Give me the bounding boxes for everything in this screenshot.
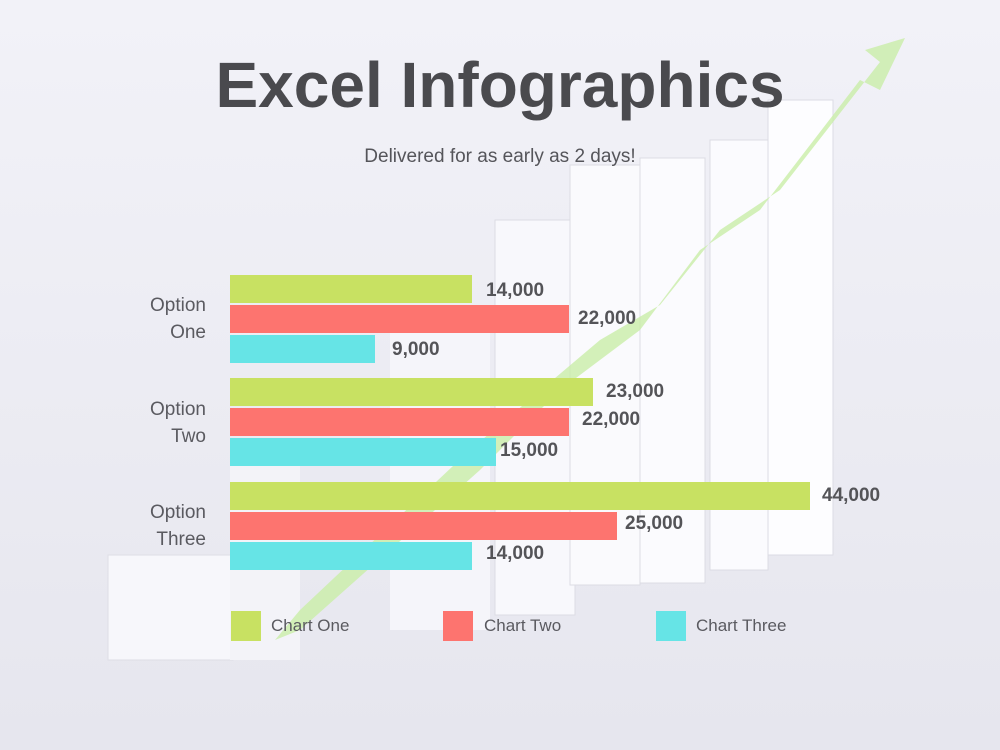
- category label: Option Three: Three: [156, 529, 206, 550]
- bars: Option One: 9,000: [392, 339, 440, 360]
- legend: [231, 611, 786, 641]
- category label: Option Two: Option: [150, 399, 206, 420]
- bars: Option Two: 22,000: [582, 409, 640, 430]
- bars: Option Three: [230, 482, 880, 570]
- category label: Option Two: Two: [171, 426, 206, 447]
- category label: Option One: Option: [150, 295, 206, 316]
- bars: Option Two: 15,000: [500, 440, 558, 461]
- bars: Option One: [230, 275, 636, 363]
- bars: Option Two: [230, 378, 664, 466]
- category label: Option Three: Option: [150, 502, 206, 523]
- title: Excel Infographics: [215, 49, 785, 121]
- category label: Option One: One: [170, 322, 206, 343]
- subtitle: Delivered for as early as 2 days!: [364, 146, 636, 167]
- category label: Option Two: [150, 399, 206, 447]
- legend: Chart Three: [696, 616, 786, 635]
- category label: Option Three: [150, 502, 206, 550]
- bar chart: [150, 295, 206, 550]
- bars: Option Three: 14,000: [486, 543, 544, 564]
- bars: Option One: 14,000: [486, 280, 544, 301]
- legend: Chart Two: [484, 616, 561, 635]
- legend: Chart One: [271, 616, 349, 635]
- bars: Option Three: 44,000: [822, 485, 880, 506]
- bars: Option Three: 25,000: [625, 513, 683, 534]
- bars: Option Two: 23,000: [606, 381, 664, 402]
- category label: Option One: [150, 295, 206, 343]
- bars: Option One: 22,000: [578, 308, 636, 329]
